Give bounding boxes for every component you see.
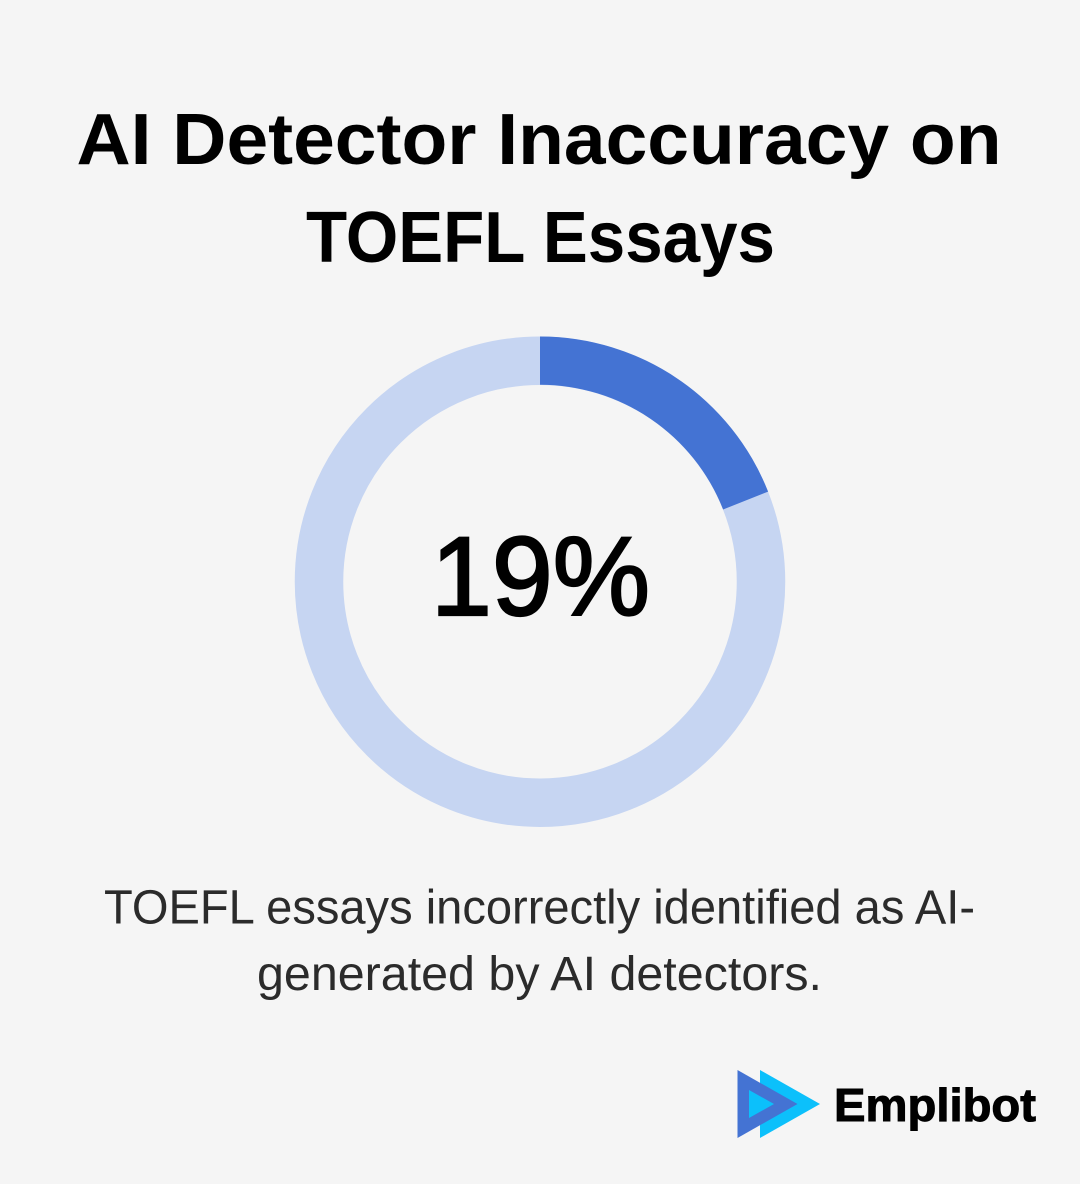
title: AI Detector Inaccuracy on [76, 100, 1002, 180]
wordmark: Emplibot [834, 1079, 1036, 1131]
icon: play triangles [738, 1070, 820, 1138]
description text: generated by AI detectors. [257, 948, 822, 1001]
description text [104, 882, 975, 1001]
title [76, 100, 1002, 278]
description text: TOEFL essays incorrectly identified as AI- [104, 882, 975, 934]
donut chart: 19% [319, 336, 768, 803]
statistic: 19%: 19% [431, 514, 650, 639]
title: TOEFL Essays [306, 198, 775, 278]
logo: Emplibot [738, 1070, 1036, 1138]
